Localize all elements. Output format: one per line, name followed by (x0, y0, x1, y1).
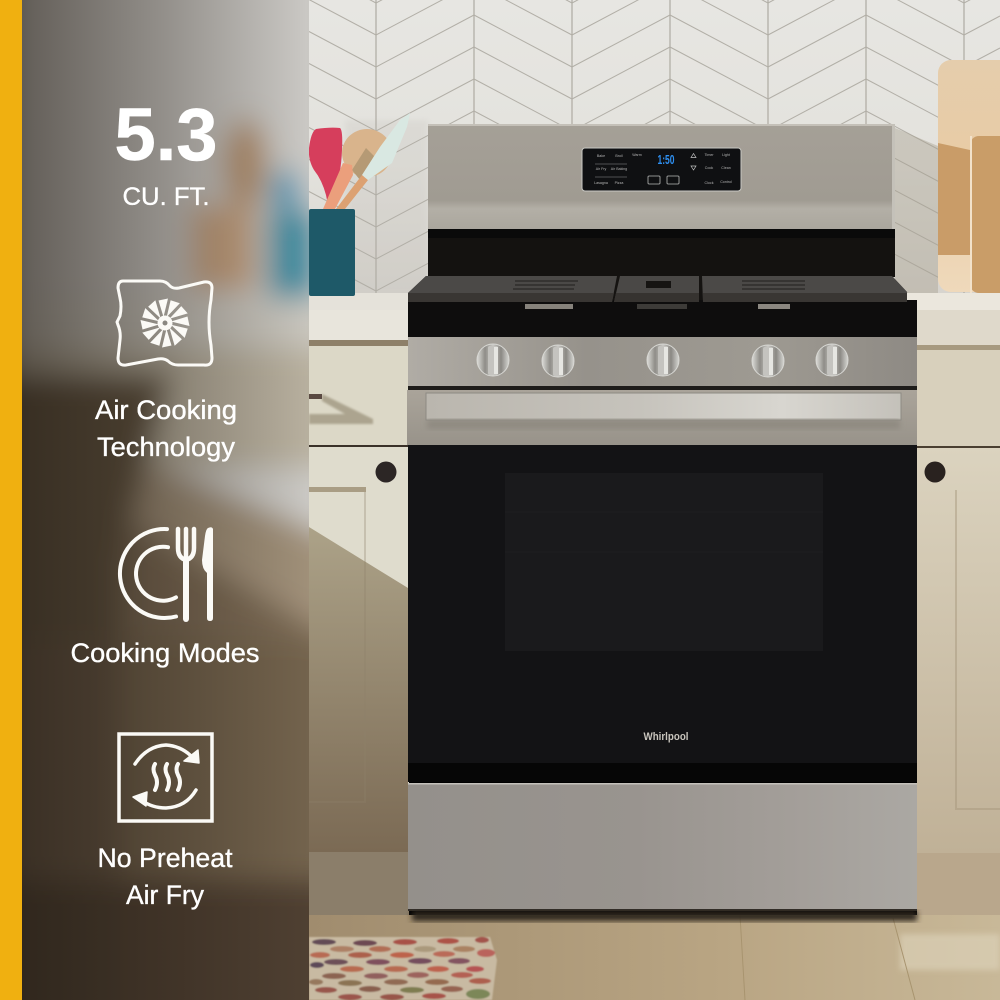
door top panel (407, 390, 917, 445)
cabinet knob left (376, 462, 396, 482)
whirlpool logo: Whirlpool (644, 731, 688, 743)
feature: no preheat air fry (98, 734, 233, 910)
control display panel: Bake (597, 154, 605, 158)
backguard (428, 124, 895, 230)
left translucent panel (22, 0, 309, 1000)
feature: capacity (114, 93, 218, 211)
left burner grate (408, 276, 617, 302)
oven door (408, 445, 917, 767)
basting brush (352, 148, 374, 180)
gas range (407, 124, 917, 921)
control display panel: Timer (704, 153, 714, 157)
cutting boards (938, 60, 1000, 293)
right counter (905, 293, 1000, 350)
panel dark overlay (22, 0, 309, 1000)
icon: steam with cycling arrows (119, 734, 212, 821)
area rug (309, 937, 497, 1000)
control display panel: Control (720, 180, 732, 184)
red spatula (309, 128, 342, 205)
icon: plate fork and knife (120, 527, 213, 621)
feature: air cooking technology (95, 281, 237, 462)
utensils in teal crock (309, 113, 410, 296)
control display panel: Clean (721, 166, 731, 170)
cabinet knob right (924, 462, 946, 482)
label: technology: Technology (97, 432, 235, 462)
spreader handle (336, 175, 368, 209)
floor (309, 915, 1000, 1000)
burner knobs (477, 344, 848, 377)
label: cooking modes: Cooking Modes (70, 638, 260, 668)
black cooktop strip (408, 300, 917, 337)
kitchen scene background (309, 0, 1000, 1000)
control display panel: Pizza (615, 181, 623, 185)
control display panel: Air Fry (596, 167, 606, 171)
right burner grate (702, 276, 907, 302)
yellow side bar (0, 0, 22, 1000)
burner control panel (408, 337, 917, 390)
control display panel: Warm (632, 153, 642, 157)
rear black well (428, 229, 895, 277)
door bottom trim (408, 763, 917, 782)
control display panel: 1:50 (658, 152, 674, 167)
right cabinet (917, 350, 1000, 915)
control display panel: Light (722, 153, 730, 157)
feature: cooking modes (70, 527, 260, 668)
control display panel: Cook (705, 166, 713, 170)
center griddle (614, 276, 699, 302)
left counter (309, 293, 409, 346)
door handle (426, 393, 901, 429)
label: air fry: Air Fry (126, 880, 204, 910)
control display panel: Lasagna (594, 181, 608, 185)
tile wall (309, 0, 1000, 323)
oven window (505, 473, 823, 651)
shadow beneath range (412, 911, 917, 921)
control display panel: Air Baking (611, 167, 627, 171)
spreader (362, 113, 410, 180)
label: air cooking: Air Cooking (95, 395, 237, 425)
control display panel: Clock (704, 181, 714, 185)
wooden spoon (342, 129, 392, 177)
teal crock (309, 209, 355, 296)
peach spatula (323, 163, 353, 209)
control display panel: Broil (615, 154, 623, 158)
cooktop base (408, 276, 907, 302)
icon: fan in wavy square (117, 281, 212, 365)
label: no preheat: No Preheat (98, 843, 233, 873)
control display panel (582, 148, 741, 191)
left cabinet (309, 346, 409, 917)
capacity unit: CU. FT. (122, 183, 210, 211)
storage drawer (408, 783, 917, 911)
blurred backdrop (22, 0, 309, 1000)
capacity figure: 5.3 (114, 93, 218, 176)
